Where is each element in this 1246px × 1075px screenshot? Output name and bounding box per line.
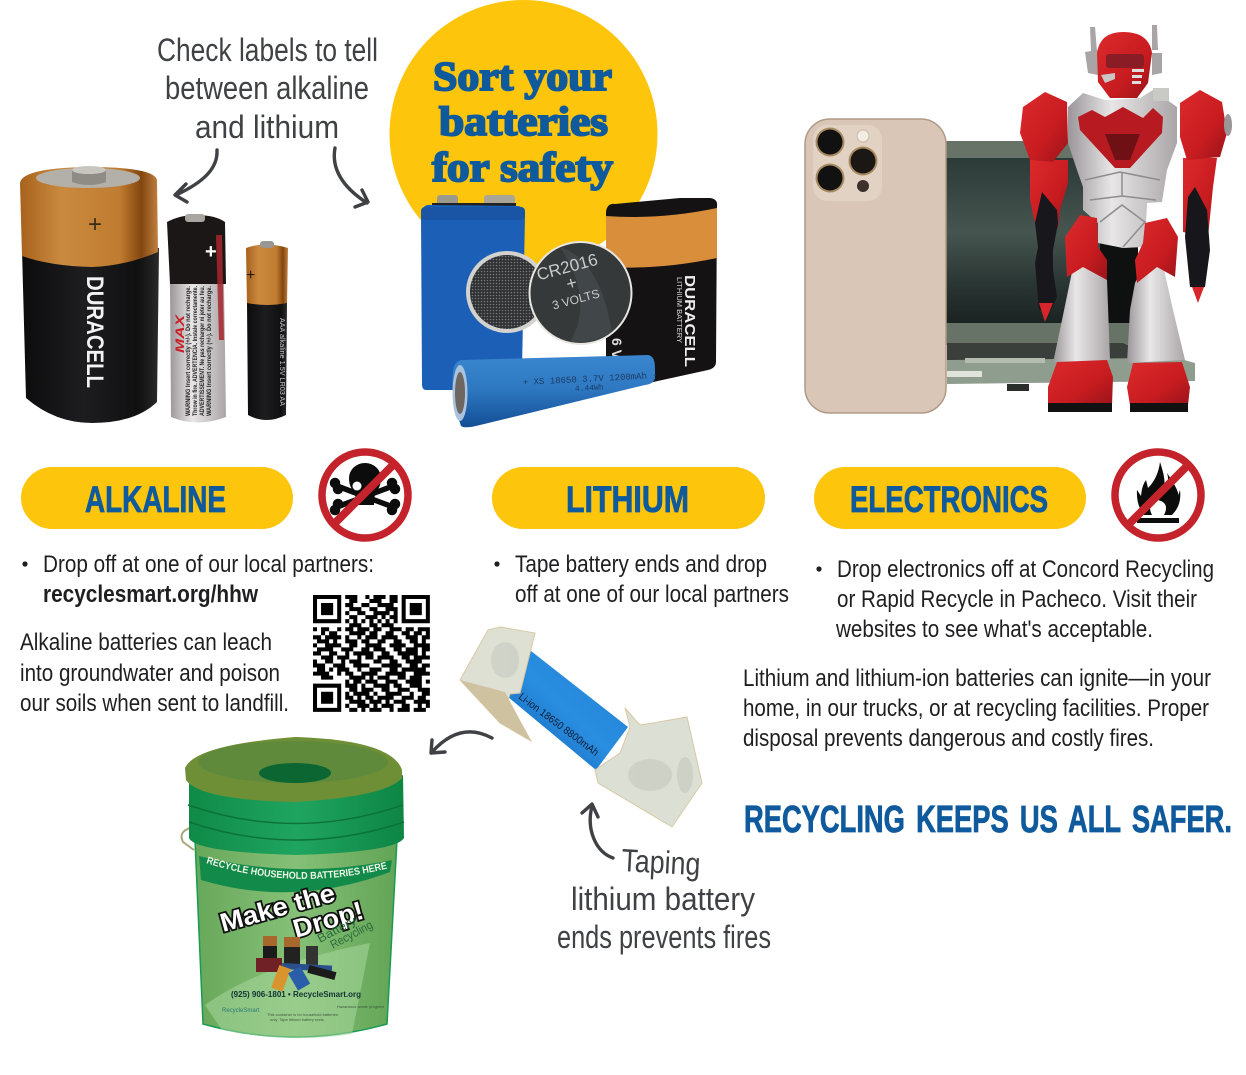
left tape xyxy=(460,627,535,741)
lid hole xyxy=(259,763,331,783)
title: Sort your batteries for safety: for safety xyxy=(432,144,614,190)
pile of batteries xyxy=(256,936,336,992)
handwritten note: check labels: between alkaline xyxy=(165,70,369,106)
lithium fire warning text: disposal prevents dangerous and costly fires. xyxy=(743,725,1154,752)
6V Duracell lithium battery xyxy=(606,198,717,386)
handwritten note: taping prevents fires xyxy=(557,842,771,955)
alkaline bullet text xyxy=(22,551,374,608)
bucket bands xyxy=(189,775,404,855)
D battery: DURACELL xyxy=(81,276,108,388)
QR code xyxy=(313,595,430,712)
bucket contact line: (925) 906-1801 • RecycleSmart.org xyxy=(231,990,361,999)
alkaline explanation text: Alkaline batteries can leach xyxy=(20,629,272,656)
icon: no poison skull xyxy=(318,448,412,542)
blue 18650 cell: + XS 18650 3.7V 1200mAh - xyxy=(523,371,658,388)
make the drop logo xyxy=(217,877,367,944)
phone xyxy=(805,119,946,413)
alkaline explanation text xyxy=(20,629,289,717)
blue 18650 cell: 4.44Wh xyxy=(575,383,604,394)
skull xyxy=(349,463,381,505)
robot abs detail xyxy=(1085,172,1160,247)
alkaline explanation text: our soils when sent to landfill. xyxy=(20,690,289,717)
lithium bullet text: off at one of our local partners xyxy=(515,581,789,608)
fine print: RecycleSmart xyxy=(222,1008,260,1014)
shoulder joint xyxy=(1224,114,1232,136)
coin cell CR2016: CR2016 xyxy=(535,250,600,284)
electronics bullet text: or Rapid Recycle in Pacheco. Visit their xyxy=(837,586,1197,613)
handle xyxy=(182,828,194,850)
robot head xyxy=(1097,32,1152,98)
robot gap between legs xyxy=(1100,243,1138,323)
photo: alkaline batteries xyxy=(20,166,288,423)
robot shins xyxy=(1053,265,1185,363)
pill heading: ELECTRONICS xyxy=(814,467,1086,529)
photo: battery recycling bucket: RECYCLE HOUSEHOLD BATTERIES HERE xyxy=(206,856,388,879)
AAA battery: AAA alkaline 1.5V LR03 AA xyxy=(278,318,285,406)
pill heading: ALKALINE: ALKALINE xyxy=(85,479,226,520)
yellow title circle xyxy=(390,0,658,268)
robot torso xyxy=(1068,90,1177,248)
D battery: + xyxy=(88,211,102,238)
alkaline bullet text: Drop off at one of our local partners: xyxy=(43,551,374,578)
AAA battery: + xyxy=(246,267,255,284)
right tape xyxy=(595,708,702,827)
robot forearms xyxy=(1030,158,1217,237)
handwritten note: check labels: Check labels to tell xyxy=(157,32,378,68)
AA battery: WARNING Insert correctly (+/-). Do not recharge. xyxy=(185,286,192,416)
robot thighs xyxy=(1065,215,1178,283)
laptop xyxy=(945,141,1195,391)
coin cell CR2016: 3 VOLTS xyxy=(551,286,601,313)
AA battery: + xyxy=(205,241,217,263)
AA battery xyxy=(167,214,226,422)
robot chest plate xyxy=(1078,107,1163,168)
battery print: Li-ion 18650 8800mAh xyxy=(516,691,601,759)
robot feet xyxy=(1048,360,1190,412)
handwritten note: taping prevents fires: lithium battery xyxy=(571,881,755,917)
handwritten note: taping prevents fires: ends prevents fires xyxy=(557,919,771,955)
lithium bullet text xyxy=(494,551,789,608)
title: Sort your batteries for safety: Sort your xyxy=(433,53,612,99)
pill heading: LITHIUM xyxy=(492,467,765,529)
AA battery: MAX xyxy=(173,314,187,353)
make the drop logo: Make the xyxy=(217,877,338,938)
battery recycling caption: Recycling xyxy=(328,918,375,952)
handwritten note: check labels xyxy=(157,32,378,145)
bucket body xyxy=(195,840,397,1037)
toy robot xyxy=(1020,25,1232,412)
title: Sort your batteries for safety xyxy=(432,53,614,190)
arrow: taping note to battery xyxy=(582,804,613,858)
handwritten note: check labels: and lithium xyxy=(195,109,339,145)
fine print: This container is for household batteries xyxy=(267,1012,338,1017)
title: Sort your batteries for safety: batteries xyxy=(439,98,608,144)
tape mottling xyxy=(491,642,693,793)
arrow: taped battery to bucket xyxy=(431,732,492,753)
coin cell, mesh side xyxy=(466,251,548,333)
alkaline bullet text: recyclesmart.org/hhw xyxy=(43,581,258,608)
photo: taped lithium battery xyxy=(460,627,702,827)
blue cell xyxy=(502,651,628,770)
fine print: only. Tape lithium battery ends. xyxy=(270,1017,325,1022)
blue 18650 cell xyxy=(452,355,658,427)
handwritten note: taping prevents fires: Taping xyxy=(621,842,701,882)
lithium fire warning text xyxy=(743,665,1211,752)
photo: electronics xyxy=(805,25,1232,413)
electronics bullet text xyxy=(816,556,1214,643)
lithium bullet text: Tape battery ends and drop xyxy=(515,551,767,578)
AA battery: Throw in fire. ADVERTENCIA. Instale correctamente. xyxy=(192,286,199,416)
pill heading: LITHIUM: LITHIUM xyxy=(566,479,689,520)
banner on bucket xyxy=(199,856,392,892)
AAA battery xyxy=(246,241,288,420)
photo: lithium batteries xyxy=(421,195,717,427)
battery recycling caption xyxy=(315,914,375,952)
coin cell CR2016 xyxy=(528,241,632,345)
photo: battery recycling bucket xyxy=(180,737,404,1038)
robot shoulders xyxy=(1020,90,1227,162)
pill heading: ELECTRONICS: ELECTRONICS xyxy=(850,479,1048,520)
9V blue battery xyxy=(421,195,525,390)
6V Duracell lithium battery: DURACELL xyxy=(681,275,698,367)
coin cell CR2016: + xyxy=(564,272,579,294)
arrow: to alkaline batteries xyxy=(175,150,217,202)
lid xyxy=(185,737,402,802)
electronics bullet text: websites to see what's acceptable. xyxy=(835,616,1153,643)
D battery xyxy=(20,166,159,423)
make the drop logo: Drop! xyxy=(289,895,367,944)
fine print: Hazardous waste program xyxy=(337,1004,385,1009)
arrow: to lithium batteries xyxy=(334,148,368,207)
alkaline explanation text: into groundwater and poison xyxy=(20,660,280,687)
crossbones xyxy=(332,480,398,512)
fine print xyxy=(222,1004,385,1022)
robot weapons xyxy=(1035,187,1210,322)
6V Duracell lithium battery: LITHIUM BATTERY xyxy=(675,277,684,343)
AA battery: WARNING Insert correctly (+/-). Do not recharge. xyxy=(206,286,213,416)
robot antennas and ears xyxy=(1085,25,1162,75)
battery recycling caption: Battery xyxy=(315,914,358,946)
pill heading: ALKALINE xyxy=(21,467,293,529)
6V Duracell lithium battery: 6 V xyxy=(609,338,625,360)
banner text xyxy=(206,863,389,879)
AA battery: ADVERTISSEMENT. Ne pas recharger ni jeter au feu. xyxy=(199,286,206,416)
icon: no fire flame xyxy=(1111,448,1205,542)
